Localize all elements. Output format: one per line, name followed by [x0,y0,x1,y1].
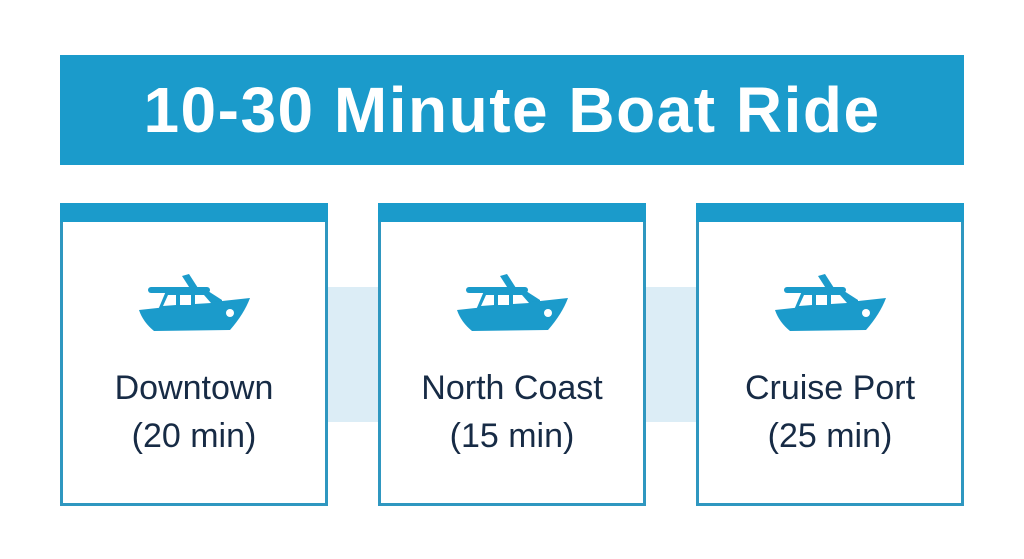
connector band 1 [326,287,380,422]
icon: boat [457,274,568,331]
title banner: 10-30 Minute Boat Ride [143,74,881,146]
text: 25 min: (25 min) [768,417,892,455]
connector band 2 [644,287,698,422]
title banner [60,55,964,165]
text: Cruise Port: Cruise Port [745,369,915,407]
text: 20 min: (20 min) [132,417,256,455]
card: North Coast [378,203,646,506]
icon: boat [775,274,886,331]
card: Downtown [60,203,328,506]
card: Cruise Port [696,203,964,506]
text: 15 min: (15 min) [450,417,574,455]
text: Downtown: Downtown [115,369,273,407]
icon: boat [139,274,250,331]
text: North Coast: North Coast [421,369,603,407]
